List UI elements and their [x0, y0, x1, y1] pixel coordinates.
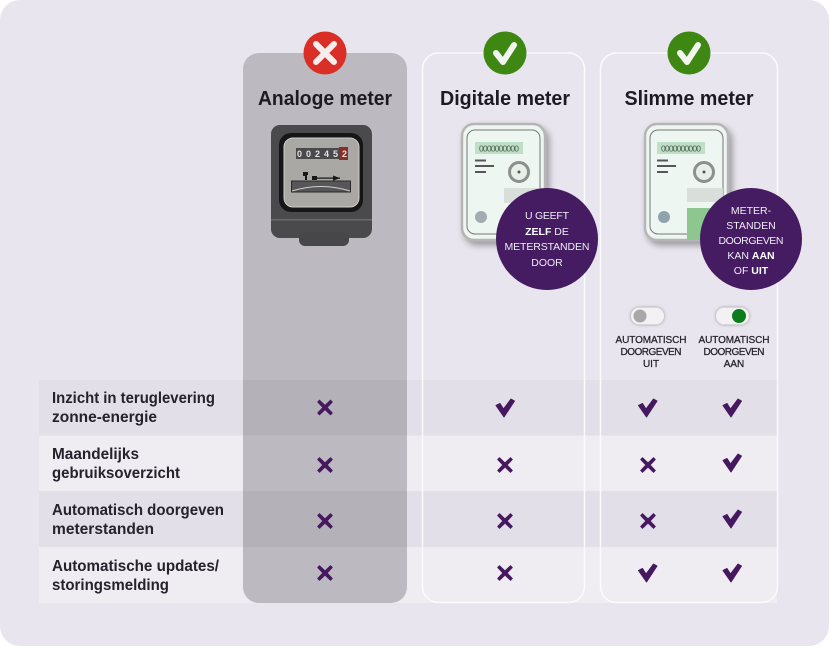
label: automatisch doorgeven uit: AUTOMATISCH: [616, 335, 686, 346]
marks: analoge meter: [318, 400, 332, 580]
callout: zelf doorgeven: ZELF DE: [525, 226, 569, 238]
row label: automatisch doorgeven: [52, 502, 224, 538]
callout: aan of uit: DOORGEVEN: [718, 235, 784, 247]
row label: maandelijks: gebruiksoverzicht: [52, 465, 180, 482]
label: automatisch doorgeven aan: DOORGEVEN: [704, 347, 764, 358]
comparison rows: [39, 380, 777, 603]
row label: automatisch doorgeven: Automatisch doorgeven: [52, 502, 224, 519]
icon: green check badge slimme: [668, 32, 710, 74]
callout: aan of uit: [700, 188, 802, 290]
icon: toggle aan: [716, 308, 749, 324]
icon: digitale meter: [462, 124, 545, 240]
callout: aan of uit: STANDEN: [726, 220, 776, 232]
label: automatisch doorgeven aan: [698, 335, 770, 370]
label: automatisch doorgeven aan: AUTOMATISCH: [698, 335, 770, 346]
icon: green check badge digitale: [484, 32, 526, 74]
callout: zelf doorgeven: METERSTANDEN: [504, 241, 590, 253]
row label: updates: [52, 558, 220, 594]
marks: digitale meter: [496, 399, 514, 580]
label: automatisch doorgeven uit: UIT: [643, 359, 659, 370]
label: automatisch doorgeven uit: [616, 335, 686, 370]
icon: slimme meter: [645, 124, 728, 240]
row label: updates: storingsmelding: [52, 577, 169, 594]
callout: zelf doorgeven: U GEEFT: [525, 210, 570, 222]
panel: digitale meter column: [422, 53, 584, 602]
panel: analoge meter column: [243, 53, 407, 603]
callout: zelf doorgeven: DOOR: [531, 257, 563, 269]
icon: analoge meter: 002452: [297, 149, 347, 159]
icon: toggle uit: [631, 308, 664, 324]
marks: slimme meter aan: [723, 399, 742, 582]
row label: teruglevering: zonne-energie: [52, 409, 157, 426]
callout: aan of uit: KAN AAN: [727, 250, 775, 262]
callout: zelf doorgeven: [496, 188, 598, 290]
callout: aan of uit: METER-: [731, 205, 772, 217]
row label: maandelijks: Maandelijks: [52, 446, 139, 463]
icon: slimme meter: 0000000000: [661, 144, 701, 154]
label: automatisch doorgeven aan: AAN: [724, 359, 744, 370]
heading: digitale meter: Digitale meter: [440, 88, 570, 110]
row label: automatisch doorgeven: meterstanden: [52, 521, 154, 538]
row label: updates: Automatische updates/: [52, 558, 220, 575]
row label: teruglevering: Inzicht in teruglevering: [52, 390, 215, 407]
callout: aan of uit: OF UIT: [734, 265, 769, 277]
icon: red cross badge: [304, 32, 346, 74]
icon: digitale meter: 0000000000: [479, 144, 519, 154]
heading: slimme meter: Slimme meter: [624, 88, 754, 110]
heading: analoge meter: Analoge meter: [258, 88, 392, 110]
row label: teruglevering: [52, 390, 215, 426]
marks: slimme meter uit: [638, 399, 657, 582]
panel: slimme meter column: [600, 53, 778, 602]
icon: analoge meter: [271, 125, 372, 246]
label: automatisch doorgeven uit: DOORGEVEN: [620, 347, 682, 358]
row label: maandelijks: [52, 446, 180, 482]
